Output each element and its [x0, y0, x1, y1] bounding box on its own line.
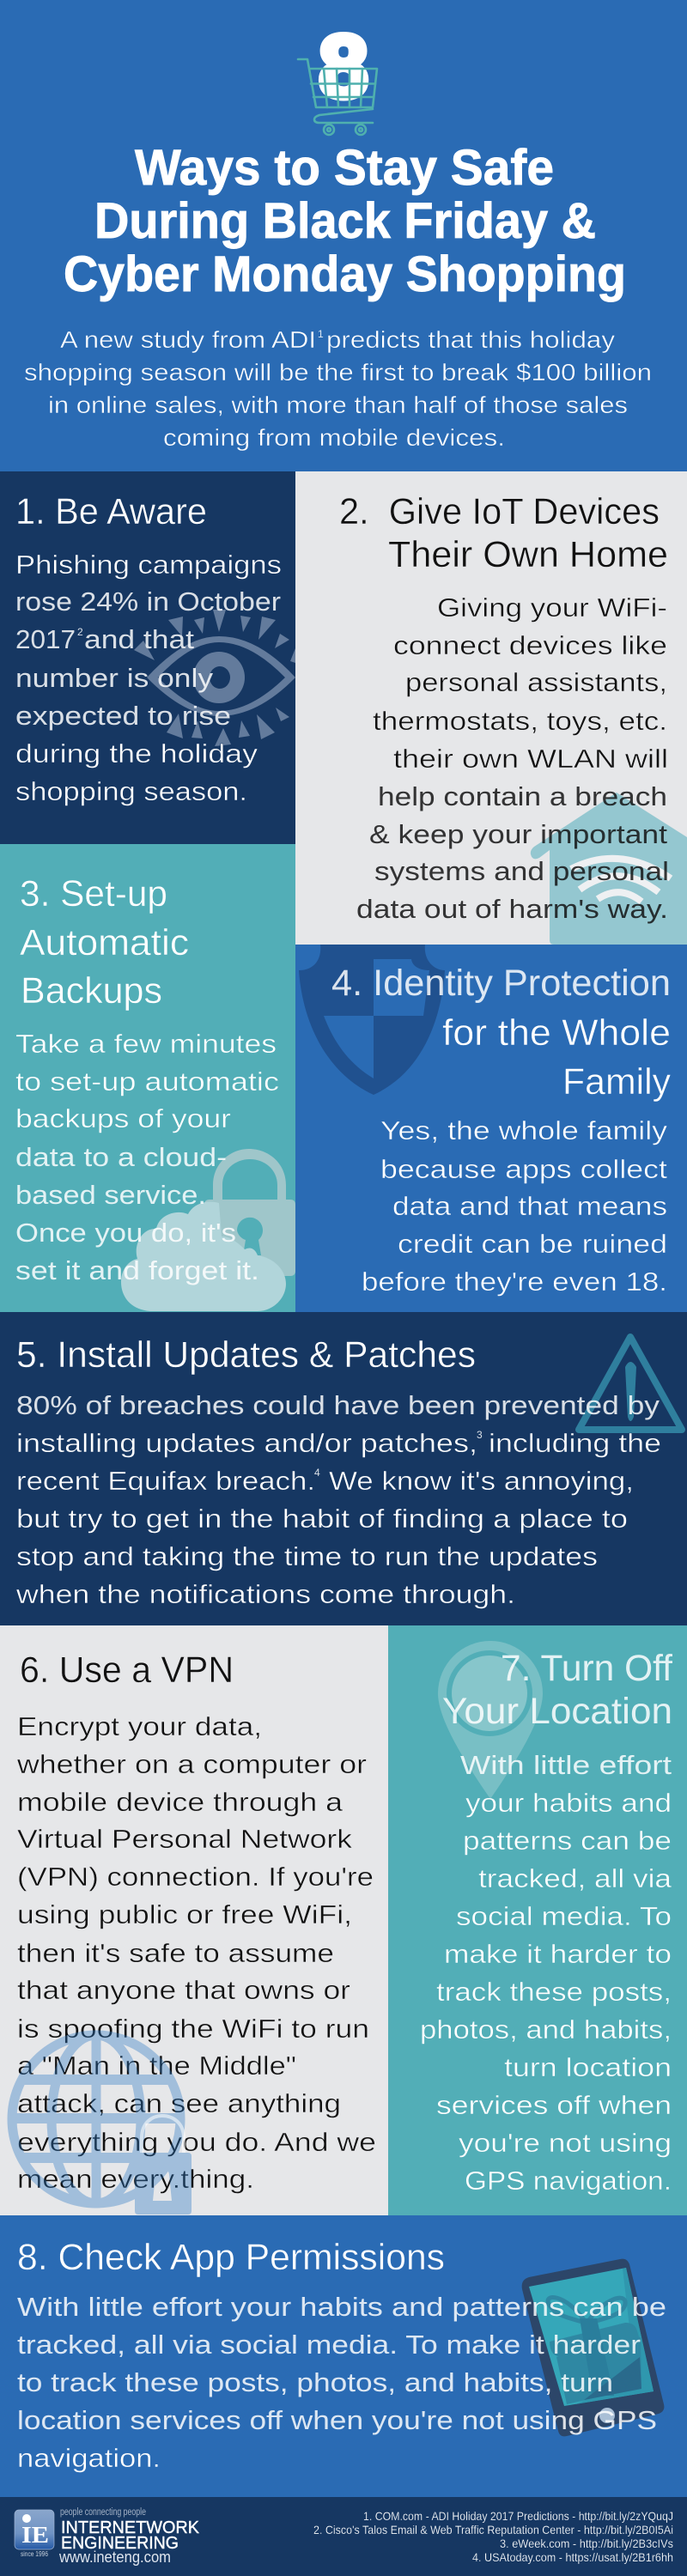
body text: everything you do. And we — [17, 2127, 376, 2157]
icon: shield — [299, 945, 445, 1095]
body text: number is only — [15, 663, 214, 693]
body text: installing updates and/or patches, — [16, 1428, 477, 1458]
logo: Internetwork Engineering: INTERNETWORK — [61, 2518, 200, 2537]
body text: GPS navigation. — [465, 2166, 672, 2196]
body text — [17, 2292, 666, 2473]
body text: when the notifications come through. — [15, 1579, 515, 1609]
panel: 4. Identity Protection — [295, 945, 687, 1312]
body text: but try to get in the habit of finding a place to — [16, 1504, 628, 1534]
icon: eye — [134, 610, 295, 746]
intro text: 1 — [318, 328, 324, 340]
panel: 7. Turn Off Your Location — [388, 1625, 687, 2215]
body text — [15, 1029, 279, 1285]
title — [64, 140, 626, 302]
intro text: coming from mobile devices. — [163, 424, 505, 451]
heading: Your Location — [442, 1691, 672, 1732]
icon: shopping cart holding the number 8 — [298, 17, 377, 135]
panel: 1. Be Aware — [0, 471, 295, 844]
body text: during the holiday — [15, 738, 258, 769]
logo: Internetwork Engineering: since 1996 — [21, 2550, 48, 2558]
body text: data out of harm's way. — [356, 894, 668, 924]
body text — [15, 1390, 661, 1609]
body text: because apps collect — [380, 1154, 667, 1184]
logo: Internetwork Engineering: www.ineteng.com — [58, 2549, 171, 2566]
body text: backups of your — [15, 1103, 231, 1133]
title: Ways to Stay Safe — [135, 140, 554, 196]
body text: attack, can see anything — [17, 2088, 341, 2118]
heading: for the Whole — [442, 1012, 671, 1054]
body text: rose 24% in October — [15, 586, 281, 617]
body text: Phishing campaigns — [15, 550, 282, 580]
icon: cloud and padlock — [121, 1149, 295, 1311]
heading — [20, 873, 189, 1012]
heading: 7. Turn Off — [501, 1648, 673, 1689]
logo: Internetwork Engineering: people connecting people — [60, 2507, 146, 2518]
body text: services off when — [436, 2090, 672, 2120]
heading — [331, 963, 671, 1103]
body text: mobile device through a — [17, 1787, 344, 1817]
panel: 8. Check App Permissions — [0, 2215, 687, 2497]
body text — [362, 1115, 668, 1297]
logo: Internetwork Engineering — [15, 2507, 200, 2566]
body text: mean every.thing. — [17, 2164, 254, 2194]
icon: shopping cart holding the number 8: 8 — [319, 17, 368, 117]
heading — [339, 491, 668, 575]
body text: recent Equifax breach. — [16, 1466, 315, 1496]
heading: 1. Be Aware — [15, 491, 207, 532]
heading: 2. Give IoT Devices — [339, 491, 660, 532]
body text: (VPN) connection. If you're — [17, 1862, 374, 1892]
body text: 2017 — [15, 624, 76, 654]
body text: your habits and — [465, 1788, 672, 1818]
body text — [356, 592, 669, 924]
footer — [0, 2497, 687, 2576]
references — [313, 2509, 673, 2564]
body text: then it's safe to assume — [17, 1938, 334, 1968]
body text: Virtual Personal Network — [17, 1824, 353, 1854]
body text: Giving your WiFi- — [437, 592, 667, 623]
body text: that anyone that owns or — [17, 1975, 350, 2005]
intro text — [24, 326, 652, 451]
body text: systems and personal — [374, 856, 669, 886]
body text: tracked, all via — [478, 1863, 672, 1893]
body text: social media. To — [456, 1901, 672, 1931]
body text: navigation. — [17, 2443, 161, 2473]
body text: & keep your important — [369, 819, 667, 849]
body text: expected to rise — [15, 701, 231, 731]
body text — [420, 1750, 672, 2196]
panel: 3. Set-up Automatic Backups — [0, 844, 295, 1312]
heading: 6. Use a VPN — [20, 1649, 234, 1691]
body text — [15, 550, 282, 806]
logo: Internetwork Engineering: ENGINEERING — [61, 2534, 179, 2553]
icon: warning triangle — [579, 1337, 682, 1430]
heading: 8. Check App Permissions — [17, 2237, 445, 2278]
body text: data and that means — [392, 1191, 667, 1221]
body text: before they're even 18. — [362, 1267, 667, 1297]
body text: to track these posts, photos, and habits, turn — [17, 2367, 613, 2397]
body text: to set-up automatic — [15, 1066, 279, 1097]
heading: Automatic — [20, 922, 189, 963]
body text: With little effort your habits and patterns can be — [17, 2292, 666, 2322]
body text: photos, and habits, — [420, 2014, 672, 2044]
body text: personal assistants, — [405, 667, 667, 697]
intro text: A new study from ADI — [60, 326, 316, 353]
body text: based service. — [15, 1180, 206, 1210]
heading: Backups — [21, 970, 162, 1012]
title: During Black Friday & — [94, 193, 596, 249]
body text: data to a cloud- — [15, 1142, 227, 1172]
heading — [442, 1648, 673, 1732]
body text: stop and taking the time to run the updates — [16, 1541, 598, 1571]
body text: Encrypt your data, — [17, 1711, 262, 1741]
heading: Family — [562, 1061, 671, 1103]
body text: tracked, all via social media. To make it harder — [17, 2330, 641, 2360]
icon: house with wifi — [531, 793, 687, 945]
body text: thermostats, toys, etc. — [373, 706, 667, 736]
heading: 3. Set-up — [20, 873, 167, 914]
body text: credit can be ruined — [398, 1229, 667, 1259]
body text: 80% of breaches could have been prevented by — [16, 1390, 660, 1420]
body text: you're not using — [459, 2128, 672, 2158]
icon: location pin — [438, 1641, 543, 1799]
body text: With little effort — [460, 1750, 672, 1780]
heading: Their Own Home — [388, 534, 668, 575]
body text: a "Man in the Middle" — [17, 2050, 296, 2081]
references: 3. eWeek.com - http://bit.ly/2B3cIVs — [500, 2537, 673, 2550]
icon: globe and padlock — [12, 2035, 192, 2215]
body text: 4 — [314, 1467, 320, 1479]
body text: using public or free WiFi, — [17, 1899, 352, 1929]
body text: is spoofing the WiFi to run — [17, 2014, 369, 2044]
body text: shopping season. — [15, 776, 247, 806]
body text: make it harder to — [444, 1939, 672, 1969]
body text: Once you do, it's — [15, 1218, 236, 1248]
body text: whether on a computer or — [16, 1749, 367, 1779]
body text: including the — [489, 1428, 661, 1458]
body text: Take a few minutes — [15, 1029, 277, 1059]
heading: 4. Identity Protection — [331, 963, 671, 1004]
body text: We know it's annoying, — [329, 1466, 634, 1496]
title: Cyber Monday Shopping — [64, 246, 626, 302]
intro text: in online sales, with more than half of those sales — [48, 392, 628, 418]
body text: track these posts, — [436, 1977, 672, 2007]
icon: phone with gift — [522, 2259, 664, 2436]
logo: Internetwork Engineering: IE — [21, 2522, 49, 2548]
body text: location services off when you're not using GPS — [17, 2405, 657, 2435]
body text: connect devices like — [393, 630, 667, 660]
body text: 2 — [77, 626, 83, 638]
body text: 3 — [477, 1429, 483, 1441]
body text: their own WLAN will — [393, 744, 668, 774]
panel: header — [0, 0, 687, 471]
body text: set it and forget it. — [15, 1255, 259, 1285]
panel: 2. Give IoT Devices Their Own Home — [295, 471, 687, 945]
body text: patterns can be — [463, 1826, 672, 1856]
body text: turn location — [504, 2052, 672, 2082]
body text — [16, 1711, 376, 2194]
body text: Yes, the whole family — [380, 1115, 668, 1145]
intro text: shopping season will be the first to break $100 billion — [24, 359, 652, 386]
body text: help contain a breach — [378, 781, 667, 811]
intro text: predicts that this holiday — [326, 326, 615, 353]
panel: 6. Use a VPN — [0, 1625, 388, 2215]
panel: 5. Install Updates & Patches — [0, 1312, 687, 1625]
body text: and that — [84, 624, 194, 654]
heading: 5. Install Updates & Patches — [16, 1334, 476, 1376]
